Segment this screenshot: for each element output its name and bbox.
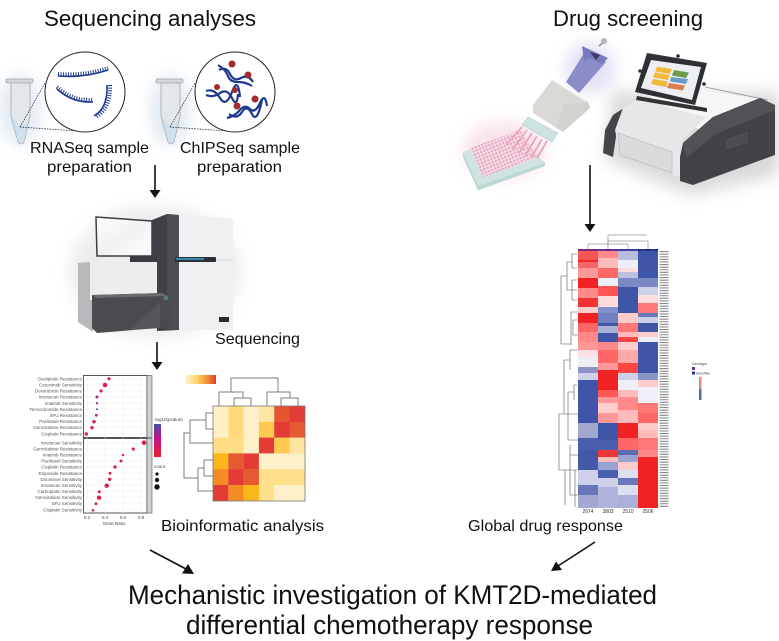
arrow: bioinformatic analysis to conclusion: [150, 550, 194, 574]
dot plot term labels: 5FU Sensitivity: [52, 501, 83, 506]
dot plot term labels: Paclitaxel Resistance: [39, 419, 82, 424]
label: ChIPSeq sample preparation: ChIPSeq sample: [180, 140, 300, 157]
drug response annotation bar: [578, 249, 658, 251]
dot plot axis: 0.8: [138, 515, 145, 520]
dot plot term labels: [29, 376, 83, 512]
label: global drug response: Global drug response: [468, 518, 623, 535]
heading: drug screening: Drug screening: [553, 6, 703, 31]
heatmap column 3803: [598, 251, 618, 508]
heatmap column 2674: [578, 251, 598, 508]
dot plot panels: [84, 376, 147, 513]
dot plot axis: [84, 515, 145, 526]
conclusion title: [128, 580, 657, 640]
icon: ChIP sample tube with magnified view: [150, 52, 275, 145]
icon: RNA sample tube with magnified view: [0, 52, 125, 145]
label: bioinformatic analysis: Bioinformatic analysis: [161, 518, 324, 535]
label: ChIPSeq sample preparation: preparation: [197, 159, 282, 176]
dot plot term labels: Irinotecan Sensitivity: [41, 440, 83, 446]
heatmap legend: Sensitive: [696, 372, 710, 376]
correlation dendrograms: [184, 378, 298, 491]
heatmap legend: [692, 362, 710, 400]
dot plot term labels: Cisplatin Resistance: [41, 432, 82, 436]
heatmap column labels: 2506: [642, 509, 654, 515]
dot plot points: [85, 377, 146, 512]
arrow: sample preparation to sequencer: [150, 165, 160, 198]
arrow: drug response to conclusion: [551, 542, 595, 571]
dot plot axis: 0.4: [102, 515, 109, 520]
chart: global drug response heatmap: [559, 235, 710, 515]
heatmap legend: Genotype: [692, 362, 707, 366]
dot plot term labels: Temozolomide Resistance: [29, 407, 82, 412]
dot plot term labels: Gemcitabine Resistance: [33, 446, 82, 452]
color key: [185, 375, 216, 384]
dot plot term labels: Imatinib Sensitivity: [45, 401, 83, 406]
label: sequencing: Sequencing: [215, 331, 300, 348]
dot plot legend: count: [154, 464, 166, 469]
dot plot term labels: Irinotecan Resistance: [39, 394, 82, 400]
arrow: drug screening to heatmap: [584, 165, 596, 232]
dot plot term labels: Gemcitabine Sensitivity: [35, 495, 83, 500]
chart: enrichment dot plot: [29, 376, 183, 526]
dot plot term labels: Gemcitabine Resistance: [33, 425, 82, 430]
conclusion title: Mechanistic investigation of KMT2D-mediated: [128, 580, 657, 610]
icon: multichannel pipette and well plate: [463, 38, 615, 190]
heatmap column labels: 2510: [622, 509, 634, 515]
dot plot legend: [154, 417, 183, 490]
dot plot term labels: Imatinib Resistance: [43, 452, 82, 458]
dot plot legend: -log10(pvalue): [154, 417, 183, 422]
conclusion title: differential chemotherapy response: [186, 610, 593, 640]
dot plot axis: 0.2: [84, 515, 91, 520]
dot plot term labels: Paclitaxel Sensitivity: [41, 458, 83, 464]
heatmap column 2510: [618, 251, 638, 508]
label: RNASeq sample preparation: [30, 140, 149, 176]
heatmap column labels: 3803: [602, 509, 614, 515]
chart: clustered correlation heatmap: [184, 378, 305, 501]
dot plot term labels: Irinotecan Sensitivity: [41, 483, 83, 488]
label: RNASeq sample preparation: RNASeq sample: [30, 140, 149, 157]
drug response row dendrogram: [559, 254, 578, 507]
heatmap column labels: 2674: [582, 509, 594, 515]
dot plot axis: 0.6: [120, 515, 127, 520]
heatmap column labels: [582, 509, 654, 515]
arrow: sequencer to bioinformatic analysis: [152, 342, 162, 370]
icon: plate reader with tablet: [603, 53, 779, 195]
dot plot term labels: Cisplatin Sensitivity: [43, 508, 83, 512]
dot plot term labels: 5FU Resistance: [50, 413, 82, 418]
label: RNASeq sample preparation: preparation: [47, 159, 132, 176]
heading: sequencing analyses: Sequencing analyses: [44, 6, 256, 31]
dot plot term labels: Cetuximab Sensitivity: [39, 382, 83, 388]
dot plot term labels: Etoposide Resistance: [38, 471, 82, 476]
drug response column dendrogram: [588, 235, 648, 249]
dot plot axis: Gene Ratio: [103, 521, 126, 526]
correlation cells: [213, 406, 305, 501]
dot plot term labels: Carboplatin Sensitivity: [37, 489, 83, 494]
heatmap row labels: [660, 251, 668, 507]
dot plot term labels: Cisplatin Resistance: [41, 464, 82, 470]
dot plot term labels: Docetaxel Sensitivity: [40, 477, 83, 482]
label: ChIPSeq sample preparation: [180, 140, 300, 176]
icon: sequencing machine: [69, 206, 241, 338]
dot plot term labels: Oxaliplatin Resistance: [37, 376, 82, 382]
heatmap column 2506: [638, 251, 658, 508]
dot plot term labels: Doxorubicin Resistance: [35, 388, 82, 394]
